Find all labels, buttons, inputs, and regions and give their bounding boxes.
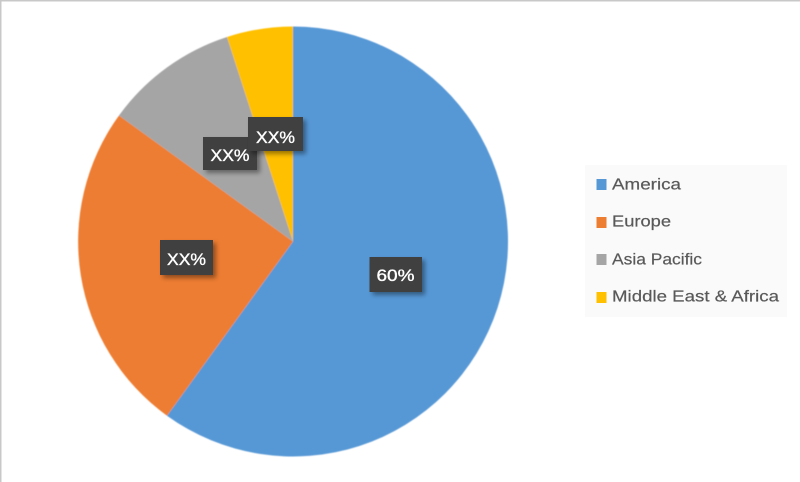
slice: Middle East & Africa	[227, 26, 293, 242]
label: Europe XX%	[160, 240, 213, 275]
slice: Asia Pacific	[119, 37, 293, 242]
label: America 60%	[370, 257, 422, 292]
legend	[585, 165, 787, 317]
slice: America 60%	[167, 26, 508, 457]
legend item: America: America	[612, 176, 681, 194]
legend item: Middle East & Africa: Middle East & Africa	[612, 288, 779, 306]
label: Europe XX%: XX%	[167, 250, 206, 269]
label: Asia Pacific XX%	[203, 137, 257, 170]
slice: Europe	[78, 116, 293, 416]
legend item: Asia Pacific: Asia Pacific	[612, 252, 702, 268]
legend item: America	[596, 176, 681, 194]
label: America 60%: 60%	[376, 266, 414, 285]
label: Middle East & Africa XX%	[248, 117, 303, 151]
label: Asia Pacific XX%: XX%	[210, 146, 250, 165]
legend item: Europe: Europe	[612, 214, 671, 230]
legend item: Europe	[596, 214, 671, 230]
pie chart	[78, 26, 508, 457]
label: Middle East & Africa XX%: XX%	[256, 128, 295, 147]
